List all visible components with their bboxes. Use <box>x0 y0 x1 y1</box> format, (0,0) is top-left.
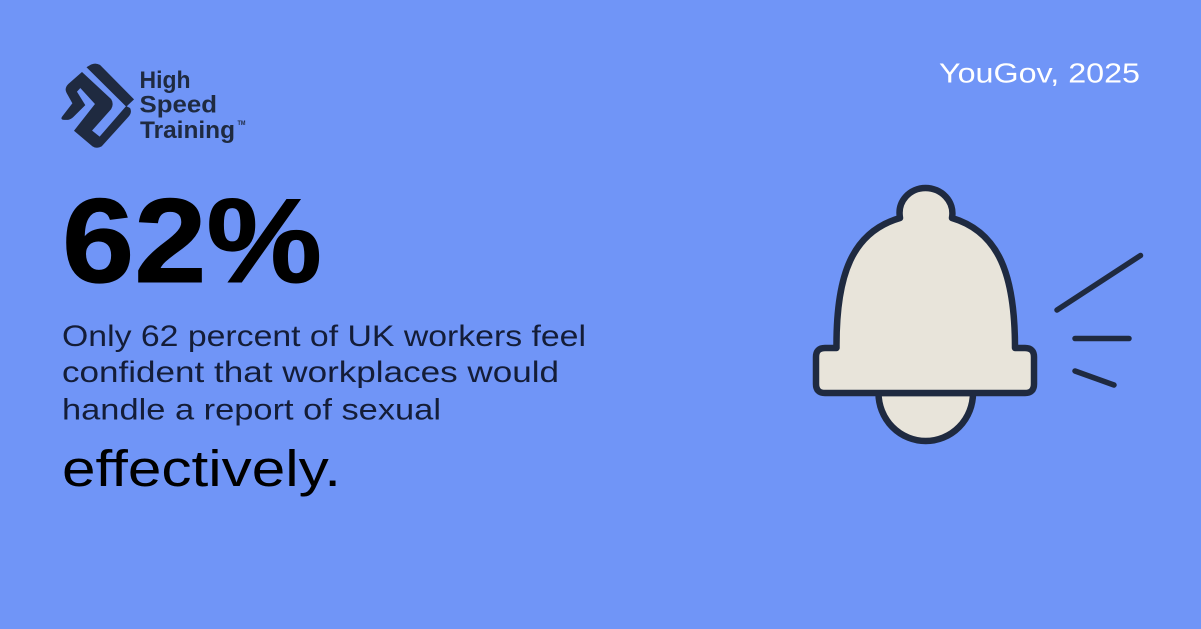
logo wordmark: Speed <box>140 92 217 118</box>
icon: logo chevrons <box>62 64 133 147</box>
body text: confident that workplaces would <box>62 356 559 389</box>
bell clapper <box>878 393 973 441</box>
body text <box>62 320 586 426</box>
logo wordmark: High <box>140 67 190 94</box>
source label: YouGov, 2025 <box>939 58 1140 88</box>
logo wordmark: Training <box>140 117 235 144</box>
icon: ringing lines <box>1057 256 1140 385</box>
bell body <box>816 188 1034 393</box>
logo wordmark: TM <box>238 121 246 127</box>
logo: High Speed Training <box>62 64 246 147</box>
logo wordmark <box>140 67 246 144</box>
headline statistic: 62% <box>62 174 322 308</box>
icon: bell <box>816 188 1034 441</box>
emphasised final word: effectively. <box>62 440 341 497</box>
body text: handle a report of sexual <box>62 394 441 426</box>
body text: Only 62 percent of UK workers feel <box>62 320 586 353</box>
